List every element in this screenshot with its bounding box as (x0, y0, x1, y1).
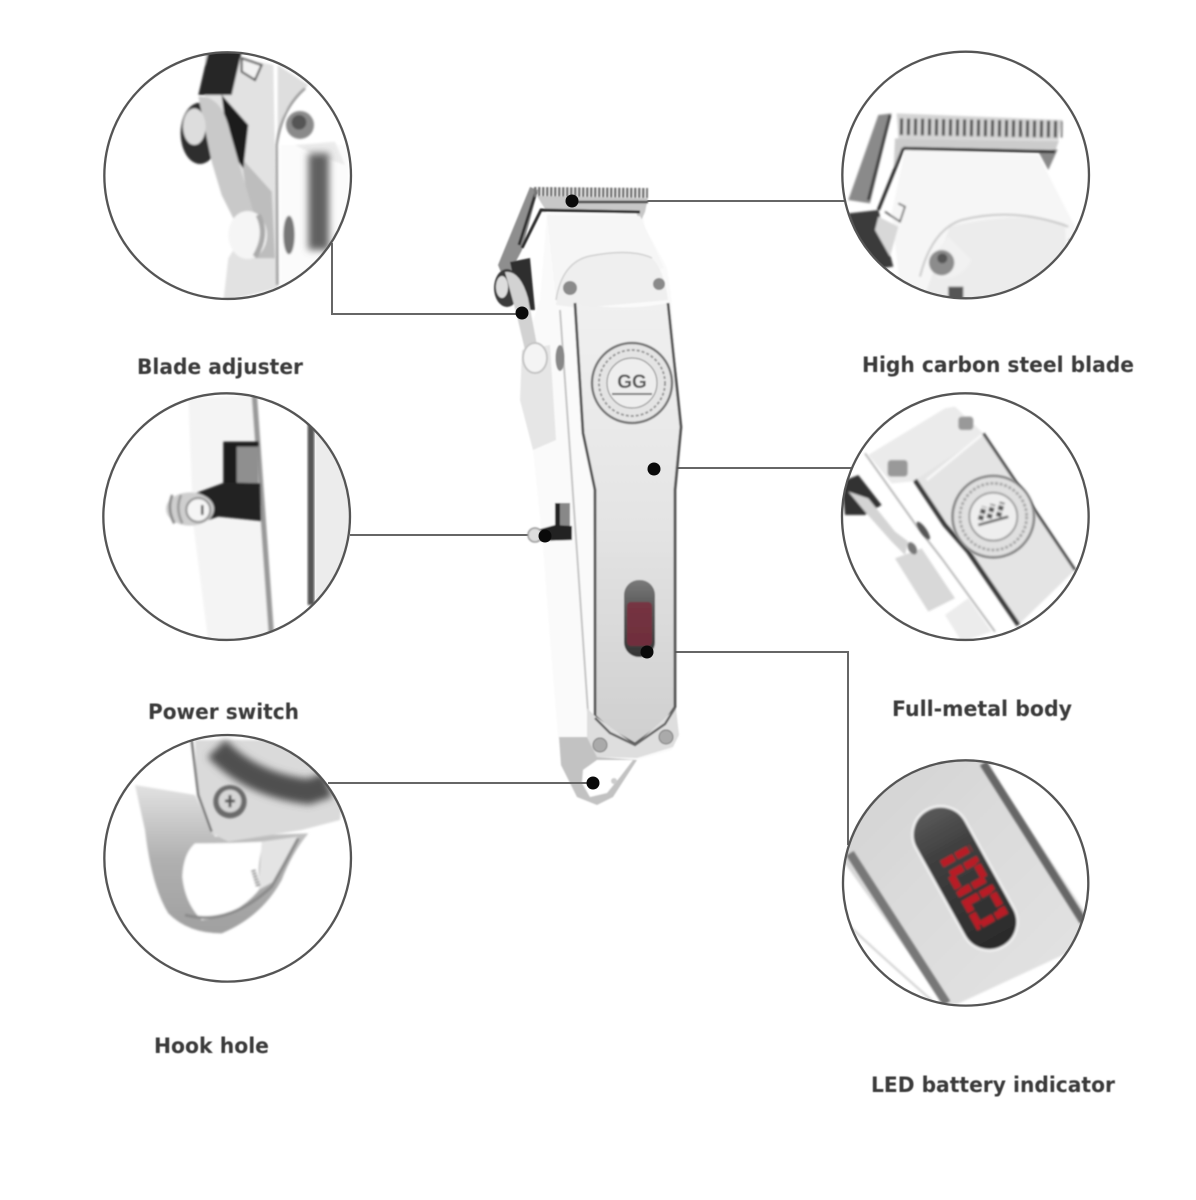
panel: LED battery indicator detail (832, 752, 1092, 1008)
connector: power switch (350, 534, 545, 536)
connector: high carbon steel blade (572, 200, 845, 202)
label: LED battery indicator: LED battery indicator (871, 1073, 1116, 1097)
label: Blade adjuster: Blade adjuster (137, 355, 304, 379)
infographic: clipper anatomy (102, 50, 1134, 1098)
label: Full-metal body: Full-metal body (892, 697, 1072, 721)
side shading (520, 345, 556, 450)
seal emblem (592, 343, 672, 423)
clipper body silhouette (520, 213, 681, 805)
blade side (498, 187, 538, 282)
blade teeth (534, 192, 648, 193)
top screws (563, 281, 577, 295)
head highlight (547, 215, 664, 300)
panel: blade adjuster detail (104, 52, 351, 302)
seal emblem: GG (617, 372, 647, 393)
label: Power switch: Power switch (148, 700, 299, 724)
hook (559, 737, 637, 805)
LED display (910, 804, 1019, 952)
bottom plate (587, 708, 679, 758)
seal close-up (953, 476, 1034, 557)
power switch (555, 503, 570, 533)
connector: hook hole (328, 782, 593, 784)
panel: high carbon steel blade detail (842, 52, 1089, 303)
adjuster lever (510, 258, 535, 310)
label: High carbon steel blade: High carbon steel blade (862, 353, 1134, 377)
connector: LED battery indicator (647, 652, 848, 845)
front plate (556, 251, 668, 308)
LED window (624, 580, 655, 657)
panel: full-metal body detail (842, 393, 1089, 642)
panel: power switch detail (103, 393, 355, 642)
panel: hook hole detail (104, 735, 351, 982)
blade band (537, 196, 648, 223)
metal panel (573, 303, 681, 742)
central clipper (328, 187, 681, 805)
connector: full-metal body (655, 467, 852, 469)
red digits (942, 848, 1006, 927)
connector: blade adjuster (332, 243, 522, 314)
callout dots (516, 194, 660, 790)
label: Hook hole: Hook hole (154, 1034, 269, 1058)
